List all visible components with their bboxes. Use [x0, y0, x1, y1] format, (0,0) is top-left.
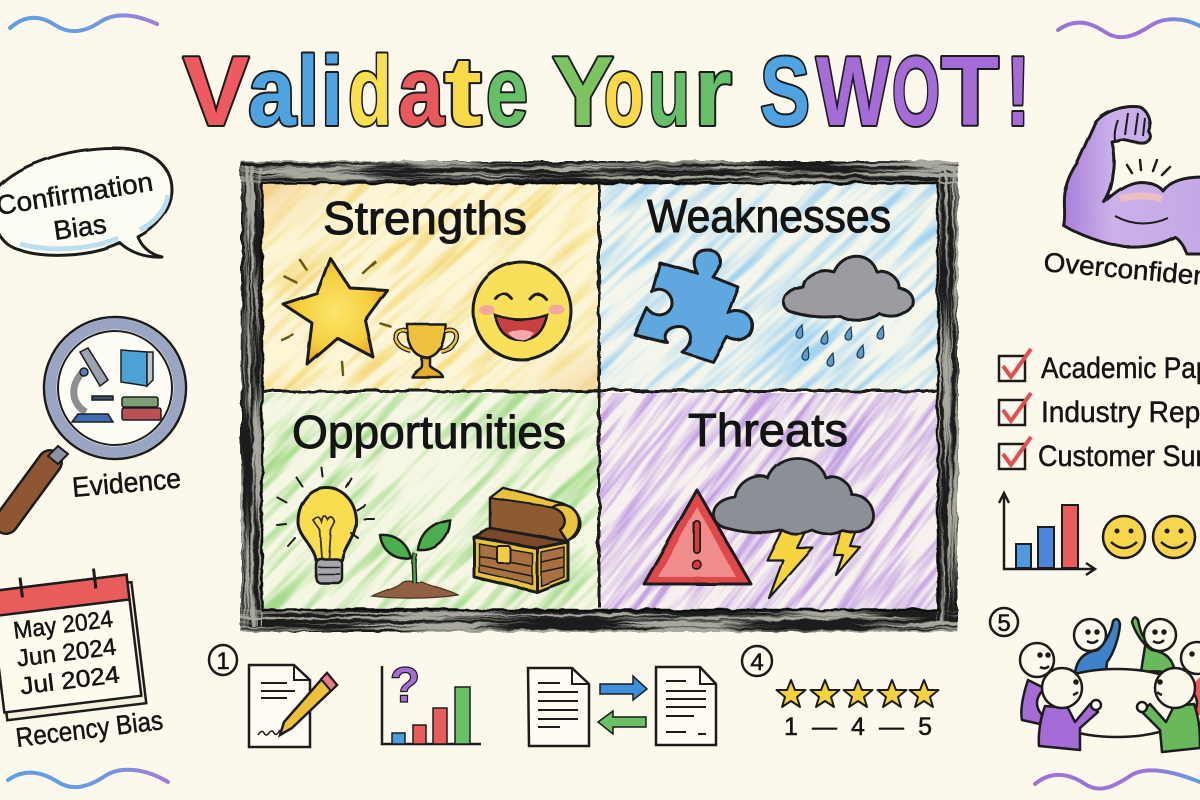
callout: confirmation bias: Bias [52, 209, 108, 246]
icon: books [121, 350, 161, 420]
panel: SWOT matrix [239, 160, 1200, 744]
squiggle: bottom right [1035, 770, 1200, 789]
step 1 badge: 1 [216, 648, 230, 675]
table [1037, 669, 1197, 737]
icon: smiley [1103, 516, 1145, 558]
squiggle: top left [10, 15, 157, 31]
heading: strengths: Strengths [323, 192, 527, 244]
title: W [816, 36, 890, 146]
panel: strengths [262, 183, 598, 390]
icon: puzzle piece [635, 250, 752, 362]
title: a [398, 36, 445, 146]
chart: survey bars [999, 493, 1095, 575]
callout: confirmation bias [0, 148, 172, 257]
squiggle: bottom left [8, 770, 168, 787]
panel: opportunities [262, 393, 598, 610]
rating scale: 1 — 4 — 5 [784, 713, 932, 741]
title: e [486, 36, 528, 146]
person: back green [1132, 617, 1176, 674]
arrow: left [598, 711, 646, 734]
icon: rain cloud [784, 256, 913, 366]
person: front left purple [1039, 668, 1101, 750]
icon: trophy [395, 324, 457, 377]
step 4 badge: 4 [750, 649, 764, 676]
icon: compare documents [528, 667, 716, 746]
title: a [248, 36, 297, 146]
icon: question chart [382, 657, 481, 744]
title: T [941, 36, 999, 146]
icon: document with pencil [249, 665, 337, 747]
icon: calendar: Jun 2024 [15, 634, 118, 673]
icon: smiley [1153, 516, 1195, 558]
icon: light bulb [277, 468, 374, 583]
panel: weaknesses [600, 183, 938, 390]
step 5 badge: 5 [997, 610, 1011, 637]
label: recency bias: Recency Bias [14, 705, 165, 753]
icon: calendar [0, 564, 146, 720]
step 4 badge [742, 646, 772, 676]
icon: happy face [473, 262, 571, 360]
person: front right green [1137, 668, 1200, 752]
icon: question chart: ? [390, 657, 420, 713]
title: O [892, 36, 940, 146]
step 5 badge [990, 608, 1018, 637]
heading: opportunities: Opportunities [292, 406, 566, 458]
arrow: right [600, 676, 647, 700]
heading: weaknesses: Weaknesses [647, 190, 891, 242]
title: ! [1006, 36, 1030, 146]
icon: star [282, 258, 390, 375]
person: back blue [1074, 619, 1120, 674]
checklist [999, 349, 1200, 473]
title: i [321, 36, 343, 146]
title: t [444, 36, 482, 146]
icon: lightning bolts [767, 530, 860, 598]
person: back right red [1181, 642, 1200, 716]
calendar dates: May 2024 [12, 606, 114, 645]
icon: magnifying glass with evidence [6, 317, 186, 522]
icon: microscope [72, 348, 113, 422]
title: d [348, 36, 392, 146]
matrix frame [235, 155, 965, 640]
title: o [604, 36, 644, 146]
squiggle: top right [1058, 19, 1200, 37]
icon: treasure chest [474, 488, 580, 592]
heading: threats: Threats [688, 404, 848, 456]
label: evidence: Evidence [71, 463, 182, 503]
title: l [297, 36, 319, 146]
title: V [183, 36, 249, 146]
title: r [694, 36, 732, 146]
rating stars [776, 680, 938, 707]
icon: flexed arm [1063, 107, 1200, 254]
title: S [760, 36, 810, 146]
step 1 badge [209, 645, 237, 675]
person: back left purple [1020, 643, 1054, 724]
icon: sprout [372, 520, 458, 598]
title: Y [552, 36, 614, 146]
title: u [648, 36, 690, 146]
icon: warning triangle [644, 490, 751, 584]
icon: storm cloud [713, 458, 873, 534]
icon: team around table [1020, 617, 1200, 752]
panel: threats [600, 393, 938, 610]
icon: calendar: Jul 2024 [19, 661, 121, 700]
